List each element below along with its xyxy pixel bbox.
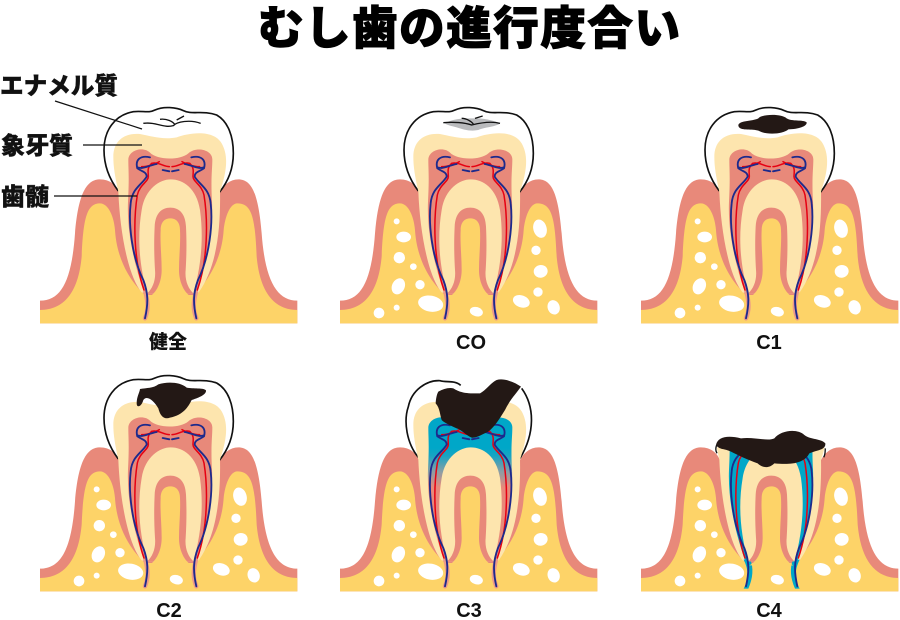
panel: C2 xyxy=(40,376,297,620)
enamel demineralisation xyxy=(445,118,500,131)
tooth diagram: C3 xyxy=(340,379,597,591)
remaining root stump and cavity xyxy=(716,431,825,467)
tooth diagram: C2 xyxy=(40,376,297,591)
label: エナメル質: エナメル質 xyxy=(0,67,118,101)
tooth diagram: C1 xyxy=(641,108,898,323)
cavity: reaching pulp xyxy=(436,379,521,438)
caption: 健全: 健全 xyxy=(149,327,187,354)
panel: C1 xyxy=(641,108,898,354)
panel: C4 xyxy=(641,430,898,617)
leader line: pulp xyxy=(54,195,137,197)
leader line: enamel xyxy=(55,101,142,129)
panel: C3 xyxy=(340,379,597,620)
panel: CO xyxy=(340,108,597,354)
leader line: dentin xyxy=(83,144,142,146)
caption: C1: C1 xyxy=(756,332,782,354)
cavity: into dentin xyxy=(137,383,206,418)
label: 象牙質: 象牙質 xyxy=(1,126,73,161)
label: 歯髄: 歯髄 xyxy=(1,177,49,212)
cavity: enamel xyxy=(738,115,807,134)
caption: CO: CO xyxy=(456,332,486,354)
broken crown xyxy=(406,381,531,458)
panel: 健全 (healthy tooth) xyxy=(0,67,297,354)
tooth diagram: healthy xyxy=(40,108,297,323)
tooth diagram: C4 xyxy=(641,430,898,592)
tooth diagram: CO xyxy=(340,108,597,323)
